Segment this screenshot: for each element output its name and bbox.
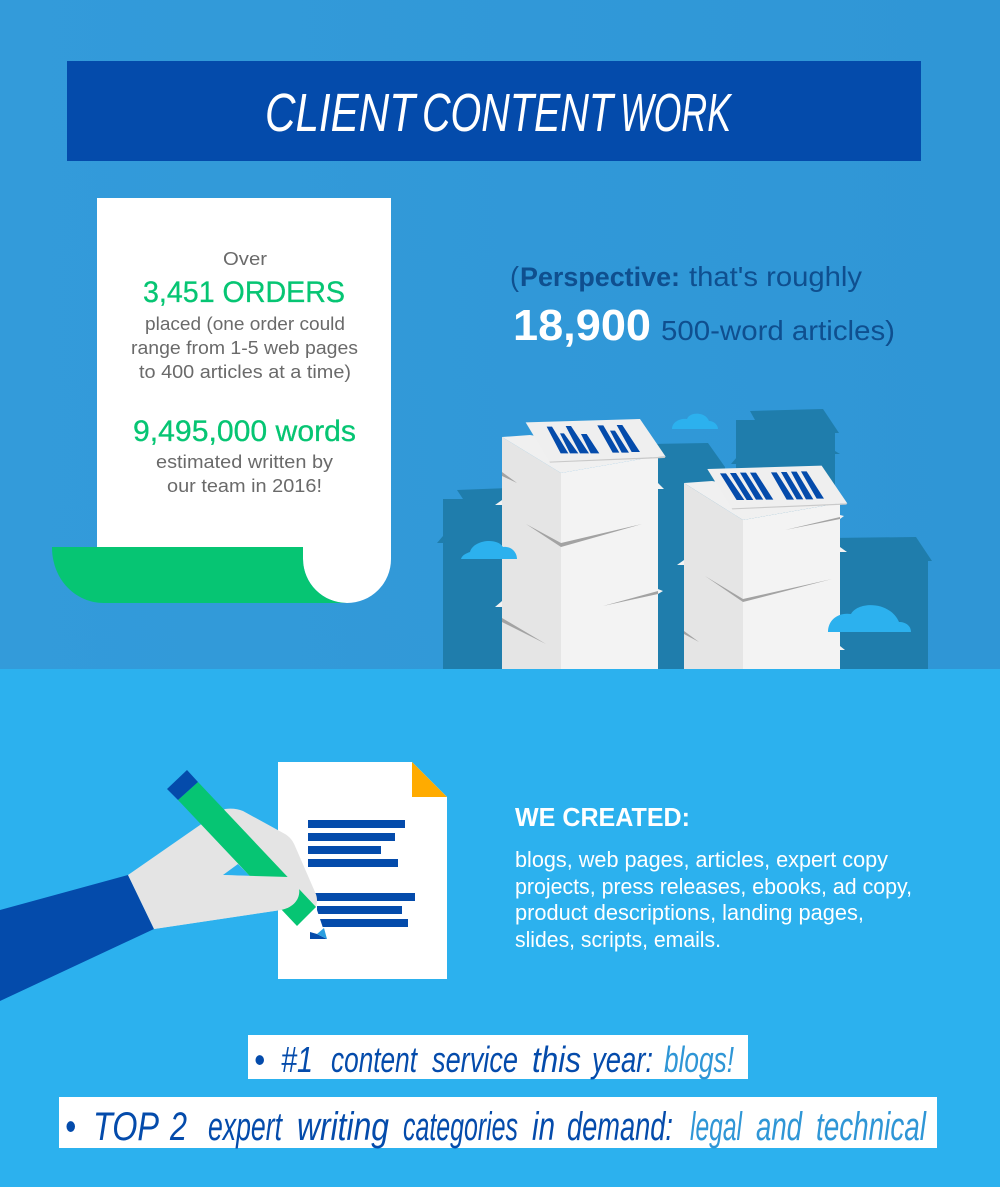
text: perspective: that's roughly bbox=[689, 261, 862, 292]
text: over: Over bbox=[223, 249, 267, 269]
panel: scroll with order statistics bbox=[52, 198, 391, 603]
text: perspective bbox=[510, 261, 895, 350]
title banner bbox=[67, 61, 921, 161]
text: order description: placed (one order could bbox=[145, 314, 345, 334]
scroll paper bbox=[97, 198, 391, 603]
title banner: WORK bbox=[620, 83, 732, 143]
callout: top expert writing categories: categories bbox=[403, 1105, 518, 1149]
cloud: top bbox=[672, 414, 718, 429]
callout: top expert writing categories: and bbox=[756, 1105, 803, 1149]
callout: top content service: year: bbox=[590, 1039, 653, 1080]
callout: top expert writing categories: • bbox=[65, 1105, 76, 1149]
illustration: document and writing hand bbox=[0, 762, 447, 1001]
stat: words: 9,495,000 words bbox=[133, 415, 356, 448]
callout: top content service bbox=[248, 1035, 748, 1080]
callout: top content service: #1 bbox=[281, 1039, 313, 1080]
text: we created: slides, scripts, emails. bbox=[515, 927, 721, 952]
hole between thumb and finger bbox=[223, 864, 250, 876]
text: perspective: 500-word articles) bbox=[661, 315, 895, 346]
text: perspective: ( bbox=[510, 261, 520, 292]
thumb bbox=[154, 875, 299, 929]
sheet with stripes bbox=[707, 466, 847, 509]
callout: top content service: content bbox=[331, 1039, 418, 1080]
callout: top expert writing categories: 2 bbox=[169, 1105, 187, 1149]
text: words description: estimated written by bbox=[156, 452, 333, 472]
text: we created: blogs, web pages, articles, expert copy bbox=[515, 847, 888, 872]
callout: top expert writing categories: expert bbox=[208, 1105, 283, 1149]
panel: top background bbox=[0, 0, 1000, 669]
text: we created: WE CREATED: bbox=[515, 802, 690, 832]
illustration: paper stacks and city bbox=[437, 409, 932, 669]
panel: bottom background bbox=[0, 669, 1000, 1187]
callout: top expert writing categories: TOP bbox=[93, 1105, 159, 1149]
callout: top content service: • bbox=[254, 1039, 265, 1080]
text: perspective: Perspective: bbox=[520, 262, 680, 292]
paper stack right bbox=[677, 466, 847, 669]
callout: top expert writing categories bbox=[59, 1097, 937, 1149]
title banner: CLIENT bbox=[265, 83, 418, 143]
text: we created: product descriptions, landing pages, bbox=[515, 900, 864, 925]
callout: top content service: service bbox=[432, 1039, 518, 1080]
sleeve bbox=[0, 875, 154, 1001]
callout: top content service: this bbox=[532, 1039, 581, 1080]
text: order description: to 400 articles at a time) bbox=[139, 362, 351, 382]
title banner: CONTENT bbox=[422, 83, 616, 143]
text: words description bbox=[156, 452, 333, 496]
text: order description: range from 1-5 web pages bbox=[131, 338, 358, 358]
text: order description bbox=[131, 314, 358, 382]
cloud: left bbox=[461, 541, 517, 559]
text: perspective: 18,900 bbox=[513, 301, 651, 350]
callout: top expert writing categories: in bbox=[532, 1105, 555, 1149]
hand palm bbox=[128, 809, 317, 929]
pencil bbox=[167, 770, 327, 939]
sheet with bar chart bbox=[526, 419, 666, 463]
text: words description: our team in 2016! bbox=[167, 476, 322, 496]
paper stack left bbox=[495, 419, 666, 669]
cloud: right bbox=[828, 605, 911, 632]
text: we created: projects, press releases, ebooks, ad copy, bbox=[515, 874, 912, 899]
callout: top content service: blogs! bbox=[664, 1039, 734, 1080]
stat: orders: 3,451 ORDERS bbox=[143, 276, 345, 309]
scroll green curl bbox=[52, 547, 347, 603]
background buildings bbox=[437, 409, 932, 669]
callout: top expert writing categories: legal bbox=[690, 1105, 743, 1149]
document bbox=[278, 762, 447, 979]
document text lines bbox=[308, 820, 415, 927]
callout: top expert writing categories: technical bbox=[816, 1105, 927, 1149]
callout: top expert writing categories: demand: bbox=[567, 1105, 673, 1149]
callout: top expert writing categories: writing bbox=[297, 1105, 389, 1149]
text: we created bbox=[515, 802, 912, 952]
